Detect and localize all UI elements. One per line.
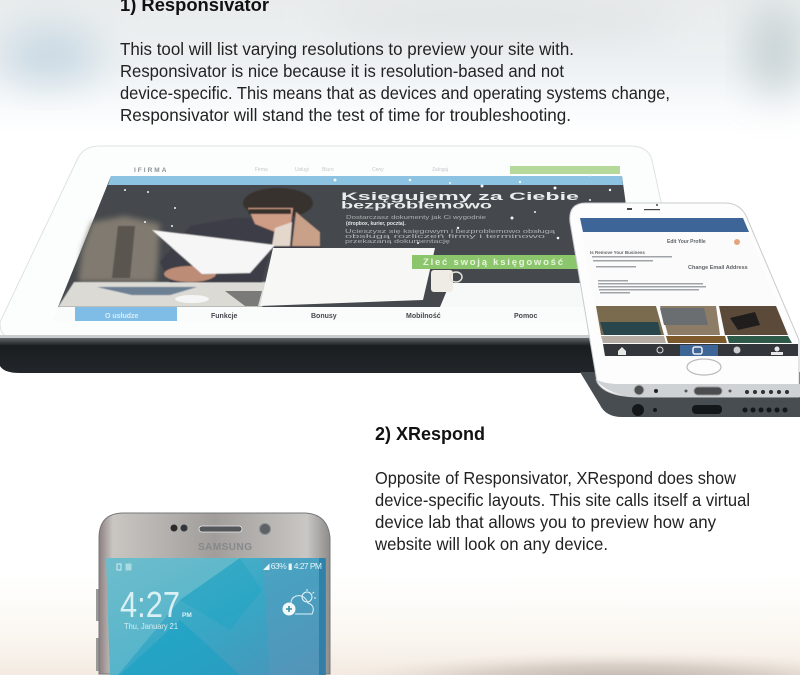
- green call to action button: [412, 255, 578, 269]
- speckles over screen: [124, 174, 611, 244]
- white strip beneath hero right: [440, 283, 640, 307]
- green call to action button: Zleć swoją księgowość: [423, 257, 563, 268]
- clock: 4:27: [120, 584, 180, 625]
- photo grid: [596, 306, 792, 343]
- tablet dark underside: [0, 337, 600, 373]
- website headline: Dostarczasz dokumenty jak Ci wygodnie: [346, 215, 486, 221]
- website tabs: O usłudze: [105, 313, 139, 320]
- bottom ports and speaker: [634, 385, 789, 395]
- status bar: ◢ 63% ▮ 4:27 PM: [263, 561, 322, 571]
- website headline: obsługą rozliczeń firmy i terminowo: [345, 234, 546, 240]
- Samsung logo: SAMSUNG: [198, 542, 252, 553]
- home button: [687, 359, 721, 375]
- phone screen: Change Email Address: [688, 265, 748, 271]
- coffee cup: [431, 270, 462, 292]
- weather icon: [282, 589, 316, 616]
- phone screen: Is Remove Your Business: [590, 250, 645, 255]
- text block: Responsivator description: device-specific. This means that as devices and operating systems change,: [120, 83, 670, 103]
- text block: Responsivator description: Responsivator will stand the test of time for troubleshooting.: [120, 105, 571, 125]
- website header: IFIRMA: [134, 167, 168, 174]
- earpiece and camera: [627, 204, 660, 210]
- website tabs: Bonusy: [311, 313, 337, 320]
- website header: Zaloguj: [432, 167, 448, 173]
- website header: [134, 166, 620, 174]
- laptop: [260, 248, 435, 306]
- text block: XRespond description: device lab that allows you to preview how any: [375, 512, 716, 532]
- website tabs: Funkcje: [211, 313, 238, 320]
- tablet showing website: [0, 146, 690, 373]
- calculator and mouse: [97, 287, 197, 295]
- website headline: [341, 191, 579, 245]
- website headline: (dropbox, kurier, poczta).: [346, 221, 406, 227]
- warm kitchen backdrop: [78, 216, 160, 282]
- text block: XRespond description: website will look on any device.: [374, 534, 608, 554]
- front camera and speaker: [170, 524, 270, 534]
- Samsung metal frame: [99, 513, 330, 674]
- text block: XRespond description: device-specific layouts. This site calls itself a virtual: [375, 490, 750, 510]
- website header: Ceny: [372, 167, 384, 173]
- website headline: bezproblemowo: [341, 200, 492, 212]
- text block: Responsivator description: Responsivator is nice because it is resolution-based and not: [120, 61, 564, 81]
- app navigation bar: [603, 344, 798, 356]
- heading: 2) XRespond: 2) XRespond: [375, 423, 485, 444]
- text block: Responsivator description: This tool will list varying resolutions to preview your site with.: [120, 39, 574, 59]
- website header: Usługi: [295, 167, 309, 173]
- tablet white body: [0, 146, 690, 337]
- phone: iPhone with Instagram style profile: [570, 203, 800, 417]
- website tabs: [52, 307, 642, 321]
- phone reflection: [580, 372, 800, 417]
- text block: XRespond description: [374, 468, 750, 554]
- lock screen: PM: [182, 612, 192, 619]
- lock screen: [106, 558, 326, 675]
- phone screen: [580, 218, 798, 357]
- website headline: Księgujemy za Ciebie: [341, 191, 579, 203]
- phone body: [570, 203, 799, 397]
- phone: Samsung Galaxy: [96, 513, 330, 675]
- text block: Responsivator description: [120, 39, 670, 125]
- website tabs: Pomoc: [514, 313, 537, 320]
- website tabs: Mobilność: [406, 313, 441, 320]
- side buttons: [96, 589, 98, 671]
- date: Thu, January 21: [124, 621, 178, 631]
- website headline: Ucieszysz się księgowym i bezproblemowo obsługą: [345, 229, 555, 235]
- website headline: przekazaną dokumentację: [345, 239, 450, 245]
- website header: Biuro: [322, 167, 334, 173]
- phone screen: Edit Your Profile: [667, 239, 706, 245]
- website header: Firma: [255, 167, 268, 173]
- text block: XRespond description: Opposite of Responsivator, XRespond does show: [375, 468, 736, 488]
- woman: [152, 188, 322, 282]
- website hero image: [58, 174, 640, 307]
